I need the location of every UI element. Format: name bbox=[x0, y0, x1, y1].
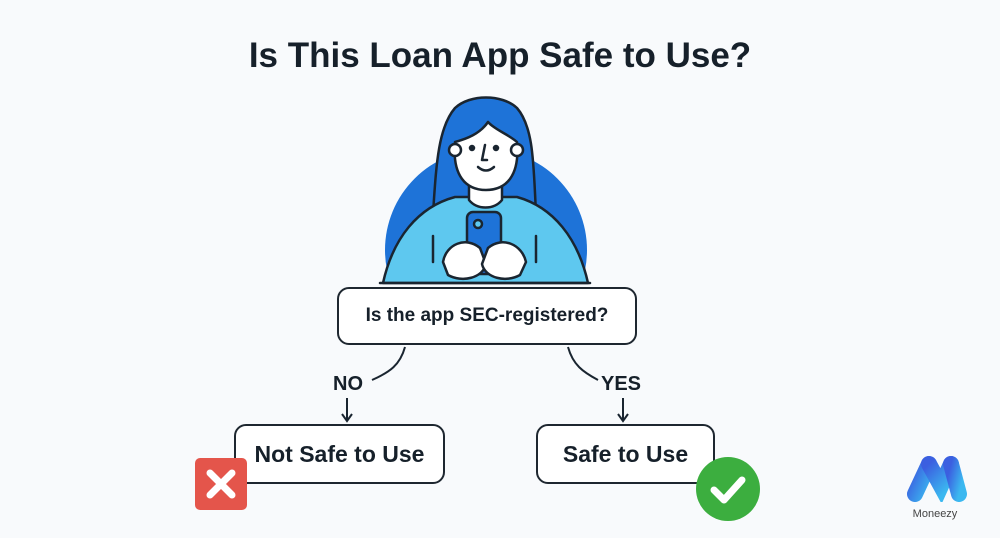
body bbox=[383, 197, 588, 283]
result box: safe bbox=[536, 424, 715, 484]
hands bbox=[443, 242, 486, 279]
label YES: YES bbox=[601, 373, 641, 395]
label NO: NO bbox=[333, 373, 363, 395]
logo: Moneezy: Moneezy bbox=[913, 508, 957, 520]
question box: Is the app SEC-registered? bbox=[366, 305, 608, 326]
background circle bbox=[385, 161, 587, 268]
result box: not safe bbox=[234, 424, 445, 484]
icon: green check bbox=[696, 457, 760, 521]
phone bbox=[467, 212, 501, 274]
result box: safe: Safe to Use bbox=[563, 440, 688, 466]
result box: not safe: Not Safe to Use bbox=[254, 440, 424, 466]
hair bbox=[432, 98, 537, 228]
neck bbox=[469, 182, 502, 208]
illustration: woman with phone bbox=[378, 96, 592, 284]
icon: red X bbox=[195, 458, 247, 510]
title: Is This Loan App Safe to Use? bbox=[249, 36, 751, 75]
face bbox=[455, 122, 517, 190]
logo: Moneezy bbox=[907, 456, 967, 520]
question box bbox=[337, 287, 637, 345]
